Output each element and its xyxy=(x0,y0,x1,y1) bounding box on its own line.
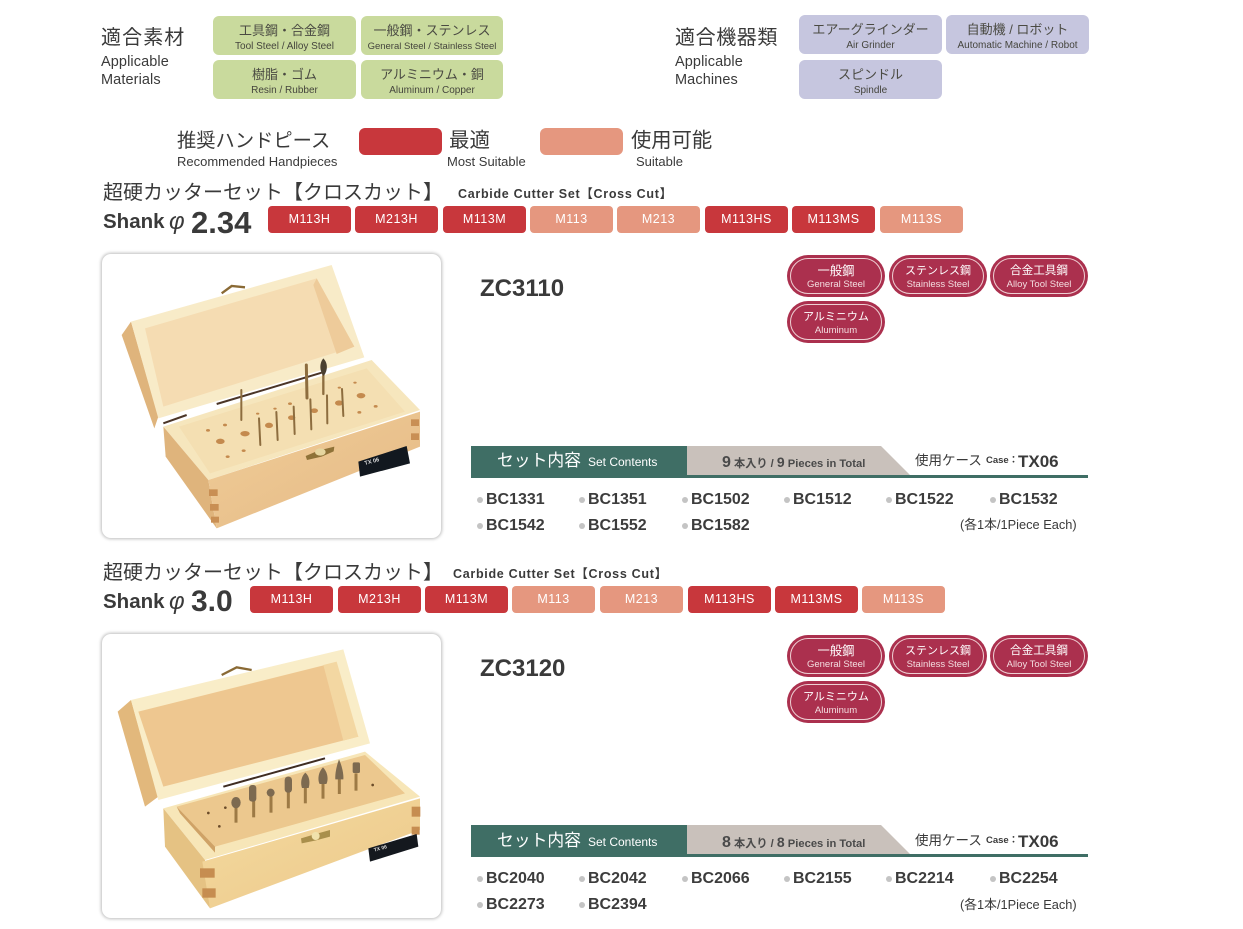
subheading: applicable materials xyxy=(101,54,169,88)
section subtitle: Carbide Cutter Set【Cross Cut】 xyxy=(458,187,673,201)
handpiece chips: M113HS xyxy=(704,592,755,606)
chip: spindle xyxy=(799,60,942,99)
material badges: ステンレス鋼 xyxy=(905,265,971,277)
legend subtitle: Recommended Handpieces xyxy=(177,154,337,169)
set contents list: BC1532 xyxy=(999,491,1058,508)
set contents header bar: セット内容 xyxy=(497,831,581,850)
shank size: 3.0 xyxy=(191,585,233,618)
material badges: ステンレス鋼 xyxy=(905,645,971,657)
legend label: suitable: 使用可能 xyxy=(631,130,712,152)
set contents list: BC1552 xyxy=(588,517,647,534)
handpiece chips: M113M xyxy=(445,592,488,606)
handpiece chips: M213 xyxy=(642,212,675,226)
model number: ZC3110 xyxy=(480,275,564,302)
product photo: wooden box with burs: TX 06 xyxy=(373,844,388,854)
set contents header bar: 9 本入り / 9 Pieces in Total xyxy=(722,454,865,471)
set contents list: BC1542 xyxy=(486,517,545,534)
chip: spindle: スピンドル xyxy=(838,67,903,82)
model number: ZC3120 xyxy=(480,655,565,682)
chip: aluminum xyxy=(361,60,503,99)
chip: air grinder: Air Grinder xyxy=(846,40,895,51)
set contents header bar: 使用ケース xyxy=(915,833,982,848)
legend sublabel: suitable: Suitable xyxy=(636,154,683,169)
handpiece chips: M113MS xyxy=(790,592,843,606)
chip: air grinder: エアーグラインダー xyxy=(812,22,929,37)
subheading: applicable materials: Materials xyxy=(101,72,161,88)
legend sublabel: most suitable: Most Suitable xyxy=(447,154,526,169)
set contents list: (各1本/1Piece Each) xyxy=(960,517,1077,532)
shank size: 2.34 xyxy=(191,205,251,240)
set contents list xyxy=(477,491,1077,534)
subheading: applicable machines: Machines xyxy=(675,72,738,88)
set contents header bar: 8 本入り / 8 Pieces in Total xyxy=(722,834,865,851)
set contents header bar xyxy=(471,446,1088,478)
product photo: wooden box with cutters: TX 06 xyxy=(364,457,380,467)
panel: applicable machines xyxy=(675,15,1089,99)
handpiece chips xyxy=(268,206,963,233)
panel: ZC3120 set xyxy=(99,562,1088,921)
chip: automatic machine: 自動機 / ロボット xyxy=(967,22,1068,37)
section subtitle: Carbide Cutter Set【Cross Cut】 xyxy=(453,567,668,581)
material badges: Aluminum xyxy=(815,325,857,336)
material badges: Alloy Tool Steel xyxy=(1007,659,1071,670)
handpiece chips: M113 xyxy=(555,212,588,226)
handpiece chips: M213H xyxy=(375,212,418,226)
material badges xyxy=(787,255,1088,343)
set contents list: (各1本/1Piece Each) xyxy=(960,897,1077,912)
handpiece chips: M113M xyxy=(463,212,506,226)
subheading: applicable materials: Applicable xyxy=(101,54,169,70)
material badges: Stainless Steel xyxy=(907,659,969,670)
material badges: Aluminum xyxy=(815,705,857,716)
set contents list: BC2254 xyxy=(999,870,1058,887)
chip: resin xyxy=(213,60,356,99)
set contents header bar: TX06 xyxy=(1018,452,1059,471)
material badges: アルミニウム xyxy=(803,311,869,323)
shank size xyxy=(103,585,233,618)
set contents list: BC1331 xyxy=(486,491,545,508)
chip: aluminum: Aluminum / Copper xyxy=(389,85,475,96)
panel: ZC3110 set xyxy=(99,182,1088,541)
legend: recommended handpieces xyxy=(177,128,712,169)
heading: applicable materials: 適合素材 xyxy=(101,27,185,49)
chip: spindle: Spindle xyxy=(854,85,887,96)
set contents header bar xyxy=(471,825,1088,857)
legend swatch: suitable xyxy=(540,128,623,155)
handpiece chips xyxy=(250,586,945,613)
set contents header bar: Set Contents xyxy=(588,835,657,849)
shank size: Shank xyxy=(103,590,165,613)
chip: resin: 樹脂・ゴム xyxy=(252,67,317,82)
legend title: 推奨ハンドピース xyxy=(177,131,330,152)
handpiece chips: M213 xyxy=(625,592,658,606)
handpiece chips: M113S xyxy=(883,592,924,606)
material badges xyxy=(787,635,1088,723)
set contents list: BC1502 xyxy=(691,491,750,508)
material badges: 一般鋼 xyxy=(818,264,854,278)
material badges: General Steel xyxy=(807,279,865,290)
set contents list: BC1522 xyxy=(895,491,954,508)
set contents header bar: Case： xyxy=(986,835,1018,846)
set contents list: BC2066 xyxy=(691,870,750,887)
material badges: Stainless Steel xyxy=(907,279,969,290)
chip: general steel: General Steel / Stainless Steel xyxy=(368,41,496,52)
legend swatch: most suitable xyxy=(359,128,442,155)
chip: air grinder xyxy=(799,15,942,54)
set contents list: BC2040 xyxy=(486,870,545,887)
shank size xyxy=(103,205,252,240)
subheading: applicable machines: Applicable xyxy=(675,54,743,70)
set contents list: BC1512 xyxy=(793,491,852,508)
set contents list: BC1582 xyxy=(691,517,750,534)
material badges: 一般鋼 xyxy=(818,644,854,658)
handpiece chips: M113H xyxy=(271,592,312,606)
chip: aluminum: アルミニウム・銅 xyxy=(380,67,484,82)
handpiece chips: M113 xyxy=(537,592,570,606)
set contents header bar: セット内容 xyxy=(497,451,581,470)
set contents header bar: Set Contents xyxy=(588,455,657,469)
set contents header bar: 使用ケース xyxy=(915,453,982,468)
shank size: φ xyxy=(169,208,185,235)
panel: applicable materials xyxy=(101,16,503,99)
chip: general steel: 一般鋼・ステンレス xyxy=(373,23,490,38)
product photo: wooden box with burs xyxy=(102,634,441,918)
handpiece chips: M113HS xyxy=(721,212,772,226)
set contents header bar: Case： xyxy=(986,455,1018,466)
set contents header bar: TX06 xyxy=(1018,832,1059,851)
set contents list: BC2155 xyxy=(793,870,852,887)
material badges: 合金工具鋼 xyxy=(1010,264,1068,277)
chip: tool steel: Tool Steel / Alloy Steel xyxy=(235,41,334,52)
material badges: 合金工具鋼 xyxy=(1010,644,1068,657)
handpiece chips: M113S xyxy=(901,212,942,226)
subheading: applicable machines xyxy=(675,54,743,88)
material badges: Alloy Tool Steel xyxy=(1007,279,1071,290)
chip: resin: Resin / Rubber xyxy=(251,85,318,96)
shank size: Shank xyxy=(103,210,165,233)
set contents list: BC2394 xyxy=(588,896,647,913)
set contents list: BC2042 xyxy=(588,870,647,887)
handpiece chips: M113MS xyxy=(807,212,860,226)
chip: tool steel: 工具鋼・合金鋼 xyxy=(239,23,330,38)
heading: applicable machines: 適合機器類 xyxy=(675,27,778,49)
chip: general steel xyxy=(361,16,503,55)
chip: automatic machine xyxy=(946,15,1089,54)
shank size: φ xyxy=(169,588,185,615)
material badges: General Steel xyxy=(807,659,865,670)
section title: 超硬カッターセット【クロスカット】 xyxy=(103,562,443,584)
legend label: most suitable: 最適 xyxy=(449,129,490,152)
handpiece chips: M113H xyxy=(289,212,330,226)
section title: 超硬カッターセット【クロスカット】 xyxy=(103,182,443,204)
set contents list xyxy=(477,870,1077,913)
handpiece chips: M213H xyxy=(358,592,401,606)
product photo: wooden box with cutters xyxy=(102,254,441,538)
set contents list: BC2273 xyxy=(486,896,545,913)
chip: tool steel xyxy=(213,16,356,55)
chip: automatic machine: Automatic Machine / Robot xyxy=(957,40,1078,51)
material badges: アルミニウム xyxy=(803,691,869,703)
set contents list: BC2214 xyxy=(895,870,954,887)
set contents list: BC1351 xyxy=(588,491,647,508)
